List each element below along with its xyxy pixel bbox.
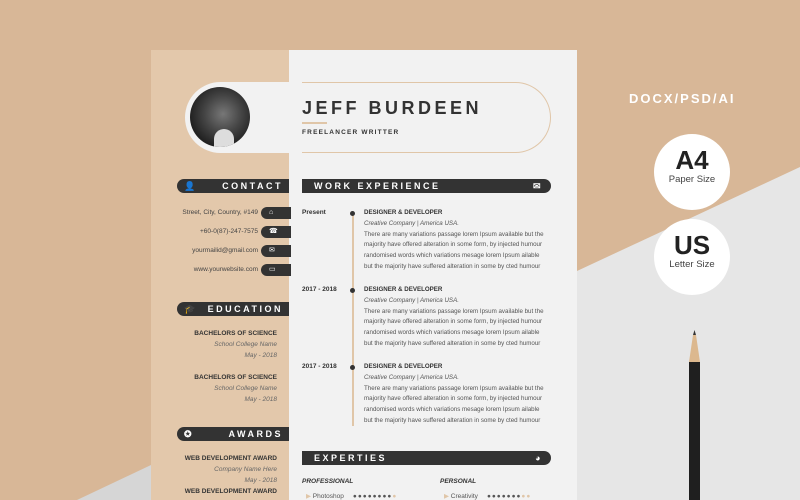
text: randomised words which variations mesage lorem Ipsum ailable	[364, 329, 539, 336]
awards entries: WEB DEVELOPMENT AWARD	[185, 488, 277, 495]
education entries: BACHELORS OF SCIENCE	[194, 374, 277, 381]
awards entries: Company Name Here	[214, 466, 277, 473]
header: education: EDUCATION	[208, 304, 283, 314]
subtitle: FREELANCER WRITTER	[302, 129, 399, 136]
contact rows: ▭	[269, 266, 276, 273]
awards entries	[184, 455, 277, 495]
text: There are many variations passage lorem Ipsum available but the	[364, 231, 544, 238]
skills: ▶ Creativity ●●●●●●●●●	[444, 493, 531, 500]
education entries	[194, 330, 277, 403]
photo	[190, 87, 250, 147]
paper: resume	[151, 50, 577, 500]
text: DESIGNER & DEVELOPER	[364, 286, 442, 293]
text: DESIGNER & DEVELOPER	[364, 209, 442, 216]
awards entries: WEB DEVELOPMENT AWARD	[185, 455, 277, 462]
name: JEFF BURDEEN	[302, 98, 482, 118]
education entries: May - 2018	[244, 352, 277, 359]
text: Creative Company | America USA.	[364, 220, 459, 227]
job 1: Present	[302, 209, 326, 216]
badge: US	[654, 219, 730, 295]
text: majority have offered alteration in some form, by injected humour	[364, 395, 542, 402]
contact rows: Street, City, Country, #149	[182, 209, 258, 216]
text: Creative Company | America USA.	[364, 374, 459, 381]
header: education: 🎓	[184, 304, 195, 314]
header: contact: 👤	[184, 181, 195, 191]
contact rows: ✉	[269, 247, 275, 254]
text: majority have offered alteration in some form, by injected humour	[364, 241, 542, 248]
skills	[302, 478, 531, 500]
contact rows	[182, 207, 291, 276]
badge: US: US	[674, 230, 710, 260]
text: Creative Company | America USA.	[364, 297, 459, 304]
header: awards: ✪	[184, 429, 192, 439]
header: contact	[177, 179, 289, 193]
text: but the majority have suffered alteration in some by cted humour	[364, 417, 540, 424]
badge: A4: A4	[675, 145, 709, 175]
header: contact: CONTACT	[222, 181, 283, 191]
badge: A4	[654, 134, 730, 210]
text: randomised words which variations mesage lorem Ipsum ailable	[364, 252, 539, 259]
header: awards: AWARDS	[228, 429, 283, 439]
pencil	[689, 330, 700, 500]
header: experties: ◕	[535, 453, 543, 463]
job 2: 2017 - 2018	[302, 286, 337, 293]
text: majority have offered alteration in some form, by injected humour	[364, 318, 542, 325]
text: DESIGNER & DEVELOPER	[364, 363, 442, 370]
name card	[185, 82, 551, 153]
awards entries: May - 2018	[244, 477, 277, 484]
text: but the majority have suffered alteration in some by cted humour	[364, 263, 540, 270]
timeline	[352, 214, 354, 426]
job 3: 2017 - 2018	[302, 363, 337, 370]
text: randomised words which variations mesage lorem Ipsum ailable	[364, 406, 539, 413]
education entries: School College Name	[214, 341, 277, 348]
text: but the majority have suffered alteration in some by cted humour	[364, 340, 540, 347]
contact rows: ⌂	[269, 209, 273, 216]
education entries: School College Name	[214, 385, 277, 392]
contact rows: ☎	[269, 228, 278, 235]
format label: DOCX/PSD/AI	[629, 91, 736, 106]
education entries: May - 2018	[244, 396, 277, 403]
skills: ▶ Photoshop ●●●●●●●●●	[306, 493, 397, 500]
header: awards	[177, 427, 289, 441]
header: education	[177, 302, 289, 316]
contact rows: yourmailid@gmail.com	[192, 247, 258, 254]
skills: PERSONAL	[440, 478, 476, 485]
text: There are many variations passage lorem Ipsum available but the	[364, 385, 544, 392]
education entries: BACHELORS OF SCIENCE	[194, 330, 277, 337]
text: There are many variations passage lorem Ipsum available but the	[364, 308, 544, 315]
badge: A4: Paper Size	[669, 174, 715, 185]
header: experties: EXPERTIES	[314, 453, 387, 463]
header: experties	[302, 451, 551, 465]
contact rows: +60-0(87)-247-7575	[200, 228, 258, 235]
header: work experience: WORK EXPERIENCE	[314, 181, 441, 191]
badge: US: Letter Size	[669, 259, 715, 270]
contact rows: www.yourwebsite.com	[194, 266, 258, 273]
header: work experience: ✉	[533, 181, 543, 191]
skills: PROFESSIONAL	[302, 478, 353, 485]
header: work experience	[302, 179, 551, 193]
